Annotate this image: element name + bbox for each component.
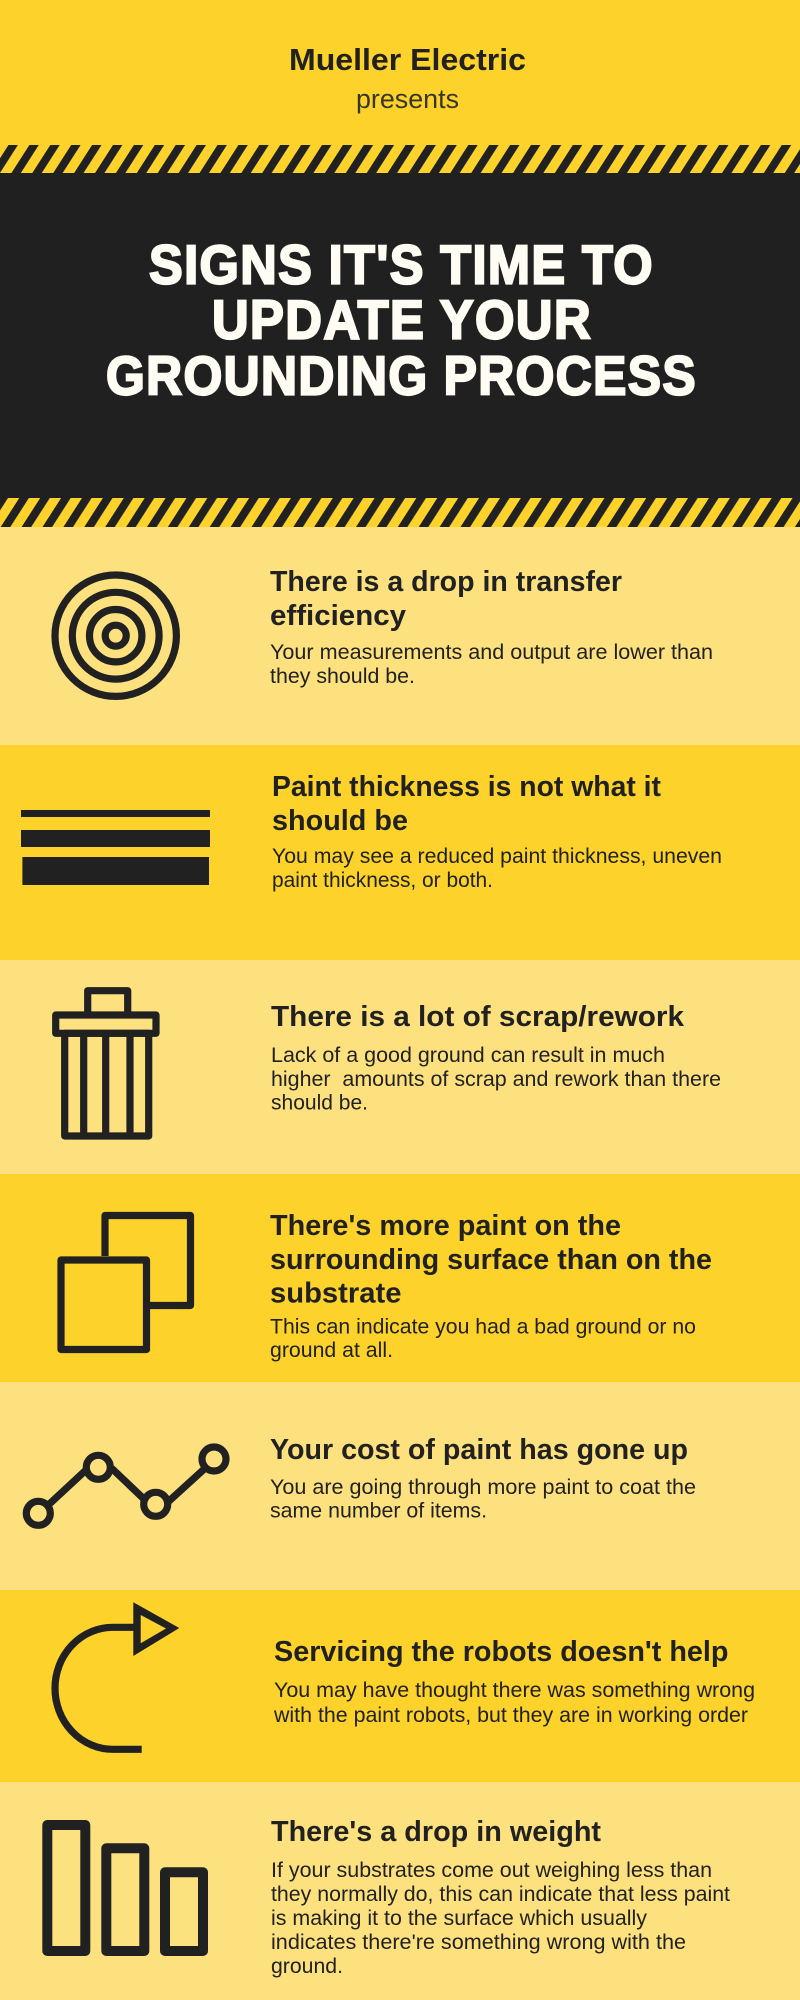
text: cost of paint: You are going through more paint to coat the [270,1475,696,1499]
text: paint thickness [272,844,722,892]
title line 2: UPDATE YOUR [212,288,592,350]
top hazard stripe [0,145,800,173]
heading: cost of paint: Your cost of paint has gone up [270,1434,688,1466]
text: scrap and rework: higher amounts of scrap and rework than there [271,1067,721,1091]
header panel [0,0,800,145]
heading: paint thickness [272,771,662,837]
panel: drop in weight [0,1782,800,2000]
heading: paint on surrounding surface: substrate [270,1278,402,1310]
panel: paint thickness [0,745,800,960]
heading: paint on surrounding surface: There's more paint on the [270,1210,621,1242]
text: servicing robots: with the paint robots, but they are in working order [273,1703,748,1727]
heading: scrap and rework: There is a lot of scrap/rework [271,1001,684,1033]
heading: transfer efficiency: There is a drop in transfer [270,566,622,598]
text: paint on surrounding surface [270,1314,696,1362]
text: drop in weight: If your substrates come out weighing less than [271,1858,712,1882]
heading: paint on surrounding surface [270,1210,712,1310]
text: servicing robots [273,1678,755,1727]
panel: transfer efficiency [0,527,800,745]
company name: Mueller Electric [289,42,526,77]
presents label: presents [356,84,459,114]
text: drop in weight: ground. [271,1954,343,1978]
text: drop in weight: indicates there're something wrong with the [271,1930,686,1954]
text: scrap and rework [271,1043,721,1114]
icon: line chart [26,1447,226,1525]
heading: paint thickness: Paint thickness is not what it [272,771,662,803]
title line 3: GROUNDING PROCESS [106,344,697,406]
heading: servicing robots: Servicing the robots doesn't help [274,1636,728,1668]
text: servicing robots: You may have thought there was something wrong [274,1678,755,1702]
icon: target [55,575,176,696]
bottom hazard stripe [0,498,800,527]
text: drop in weight: they normally do, this can indicate that less paint [271,1882,730,1906]
heading: paint on surrounding surface: surrounding surface than on the [270,1244,712,1276]
text: scrap and rework: Lack of a good ground can result in much [271,1043,665,1067]
text: transfer efficiency [270,640,713,688]
icon: curved arrow [55,1602,179,1749]
text: drop in weight: is making it to the surface which usually [271,1906,647,1930]
text: transfer efficiency: they should be. [270,664,415,688]
title panel [0,173,800,498]
panel: cost of paint [0,1382,800,1590]
text: drop in weight [271,1858,730,1978]
text: cost of paint [270,1475,696,1522]
icon: overlapping squares [61,1216,190,1350]
text: cost of paint: same number of items. [270,1498,487,1522]
panel: paint on surrounding surface [0,1174,800,1382]
icon: descending bars [47,1825,203,1951]
text: paint thickness: You may see a reduced paint thickness, uneven [272,844,722,868]
text: paint on surrounding surface: This can indicate you had a bad ground or no [270,1314,696,1338]
text: paint on surrounding surface: ground at all. [270,1338,393,1362]
text: scrap and rework: should be. [271,1090,368,1114]
text: transfer efficiency: Your measurements and output are lower than [270,640,713,664]
heading: transfer efficiency: efficiency [270,600,406,632]
text: paint thickness: paint thickness, or both. [272,868,493,892]
icon: three lines [21,810,210,885]
icon: trash can [56,991,156,1136]
title line 1: SIGNS IT'S TIME TO [149,234,654,296]
panel: scrap and rework [0,960,800,1174]
heading: paint thickness: should be [272,805,408,837]
panel: servicing robots [0,1590,800,1782]
heading: transfer efficiency [270,566,622,632]
heading: drop in weight: There's a drop in weight [271,1816,602,1848]
